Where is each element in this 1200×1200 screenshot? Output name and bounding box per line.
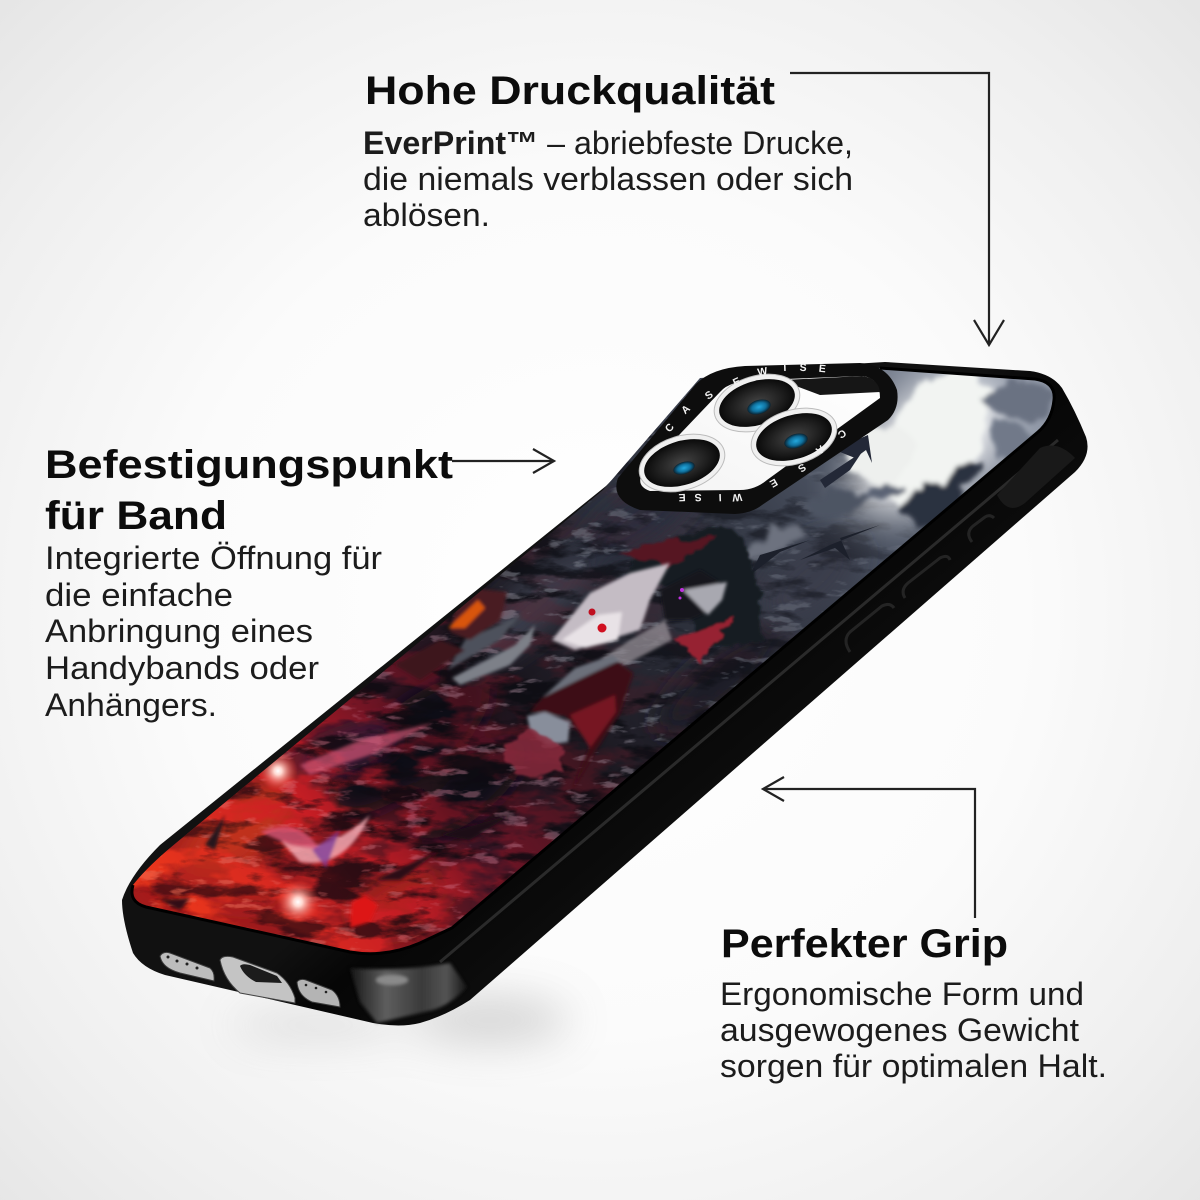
lenses bbox=[632, 364, 844, 502]
casewise lettering: S bbox=[703, 389, 716, 402]
text block: Befestigung: Handybands oder bbox=[45, 650, 319, 686]
eyes bbox=[598, 624, 606, 632]
casewise lettering bbox=[663, 362, 848, 503]
casewise lettering: W bbox=[757, 365, 768, 379]
screen artwork bbox=[133, 368, 1053, 952]
casewise lettering: C bbox=[663, 421, 677, 435]
casewise lettering: E bbox=[818, 363, 826, 375]
lava and flare bbox=[160, 723, 510, 928]
heading: Befestigungspunkt für Band bbox=[45, 443, 453, 538]
text block: Befestigung: Integrierte Öffnung für bbox=[45, 540, 382, 576]
casewise lettering: I bbox=[718, 491, 722, 503]
casewise lettering: S bbox=[799, 362, 807, 374]
text block: EverPrint: ablösen. bbox=[363, 197, 490, 233]
left speaker bbox=[160, 952, 214, 981]
text block: Befestigung: die einfache bbox=[45, 577, 233, 613]
text block: Befestigung: Anbringung eines bbox=[45, 613, 313, 649]
text block: Grip: ausgewogenes Gewicht bbox=[720, 1012, 1079, 1048]
arrow: strap mount bbox=[452, 449, 554, 473]
camera island bbox=[616, 362, 898, 514]
casewise lettering: E bbox=[678, 491, 686, 503]
case body bbox=[122, 362, 1088, 1026]
casewise lettering: S bbox=[694, 491, 702, 503]
phone shadow bbox=[230, 998, 570, 1042]
text block: Grip bbox=[720, 976, 1107, 1084]
painterly noise layers bbox=[133, 395, 914, 952]
heading: Befestigungspunkt für Band: Befestigungspunkt bbox=[45, 443, 453, 487]
charge port bbox=[220, 956, 295, 1003]
casewise lettering: A bbox=[679, 402, 693, 417]
side highlight bbox=[440, 440, 1058, 962]
text block: EverPrint bbox=[363, 125, 853, 233]
hair and face bbox=[552, 563, 727, 665]
corner gloss bbox=[350, 963, 467, 1023]
text block: Grip: Ergonomische Form und bbox=[720, 976, 1084, 1012]
screen rim bbox=[132, 368, 1054, 954]
casewise lettering: A bbox=[813, 442, 826, 457]
red blotch bbox=[505, 730, 565, 780]
arrow: print quality bbox=[790, 73, 1004, 345]
casewise lettering: S bbox=[795, 461, 808, 474]
casewise lettering: E bbox=[731, 375, 742, 389]
casewise lettering: C bbox=[835, 426, 848, 441]
casewise lettering: I bbox=[783, 362, 787, 374]
text block: EverPrint: die niemals verblassen oder sich bbox=[363, 161, 853, 197]
moon bbox=[833, 352, 1027, 538]
text block: EverPrint: EverPrint™ – abriebfeste Drucke, bbox=[363, 125, 853, 161]
strap mount bbox=[997, 446, 1075, 508]
casewise lettering: E bbox=[767, 476, 780, 490]
casewise lettering: W bbox=[732, 491, 743, 503]
stars bbox=[278, 882, 318, 923]
heading: Perfekter Grip: Perfekter Grip bbox=[721, 922, 1008, 966]
text block: Befestigung bbox=[45, 540, 382, 723]
bat wings bbox=[395, 587, 633, 790]
phone case illustration bbox=[100, 347, 1100, 1026]
heading: Befestigungspunkt für Band: für Band bbox=[45, 494, 227, 538]
arrow: grip bbox=[763, 777, 975, 918]
bat and silhouettes bbox=[750, 435, 880, 575]
right speaker bbox=[297, 979, 340, 1007]
side buttons bbox=[846, 516, 994, 652]
dark hood and red wing tips bbox=[617, 525, 760, 665]
text block: Grip: sorgen für optimalen Halt. bbox=[720, 1048, 1107, 1084]
text block: Befestigung: Anhängers. bbox=[45, 687, 217, 723]
heading: Hohe Druckqualität: Hohe Druckqualität bbox=[365, 69, 775, 113]
